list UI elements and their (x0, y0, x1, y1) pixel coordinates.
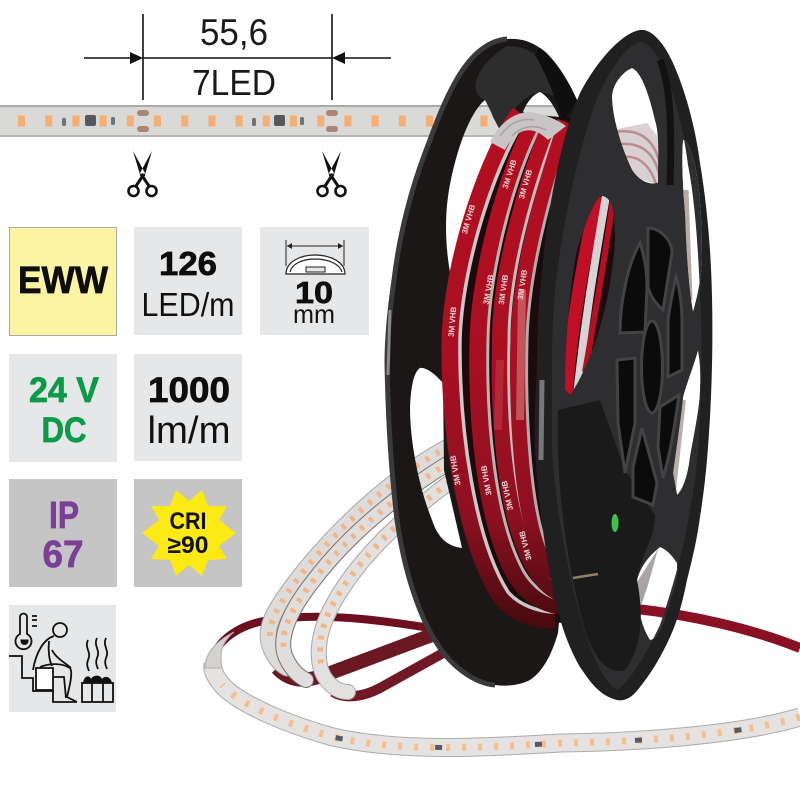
dimension: 55,6 / 7LED (84, 12, 391, 103)
3M VHB tape lettering: 3M VHB (516, 269, 529, 300)
spool seen behind front flange holes (612, 123, 690, 606)
LED strip on top (0, 105, 570, 137)
back reel flange (387, 39, 590, 686)
green sticker (612, 514, 618, 532)
3M VHB tape lettering: 3M VHB (481, 274, 496, 305)
badge: IP 67: IP (49, 495, 79, 537)
badge: IP 67: 67 (42, 534, 84, 576)
badge: sauna temperature icon (9, 605, 116, 712)
badge: 1000 lm/m: lm/m (148, 410, 230, 452)
label reflection on flange (573, 574, 598, 578)
badge: 126 LED/m: 126 (159, 245, 217, 282)
3M VHB tape lettering: 3M VHB (501, 158, 519, 190)
badge: 24 V DC: 24 V (29, 371, 100, 410)
badge: 24 V DC: DC (42, 411, 86, 450)
tape seen through middle hole (560, 190, 620, 400)
dimension: 55,6 / 7LED: 55,6 (200, 12, 268, 53)
tape coil with red 3M adhesive (443, 112, 590, 625)
dimension: 55,6 / 7LED: 7LED (192, 62, 276, 103)
badge: 126 LED/m: LED/m (142, 286, 234, 323)
scissors left (128, 151, 156, 196)
reel hub with spokes (617, 228, 682, 505)
badge: IP 67 (9, 479, 117, 587)
red backing of floor strip (212, 609, 800, 696)
badge: 126 LED/m (134, 227, 242, 335)
badge: 10 mm width: mm (293, 299, 335, 329)
badge: CRI 90: ≥90 (168, 532, 208, 559)
3M VHB tape lettering: 3M VHB (500, 480, 515, 511)
3M VHB tape lettering: 3M VHB (517, 168, 534, 200)
badge: EWW (10, 228, 116, 336)
badge: 1000 lm/m: 1000 (148, 371, 230, 410)
badge: 1000 lm/m (134, 354, 242, 461)
3M VHB tape lettering: 3M VHB (448, 455, 463, 486)
lower LED strip loops (268, 446, 450, 692)
badge: EWW: EWW (18, 260, 108, 302)
3M VHB tape lettering: 3M VHB (447, 306, 458, 337)
3M VHB tape lettering: 3M VHB (479, 465, 494, 496)
badge: 10 mm width (260, 227, 369, 335)
badge: CRI 90: CRI (170, 508, 206, 535)
scissors right (318, 151, 346, 196)
badge: 24 V DC (9, 354, 117, 462)
3M VHB tape lettering (447, 158, 534, 561)
badge: CRI 90 (134, 479, 242, 587)
front reel flange (535, 30, 712, 700)
floor LED strip (205, 632, 800, 748)
3M VHB tape lettering: 3M VHB (460, 203, 477, 235)
3M VHB tape lettering: 3M VHB (517, 530, 534, 561)
3M VHB tape lettering: 3M VHB (497, 274, 510, 305)
badge: 10 mm width: 10 (295, 275, 333, 310)
